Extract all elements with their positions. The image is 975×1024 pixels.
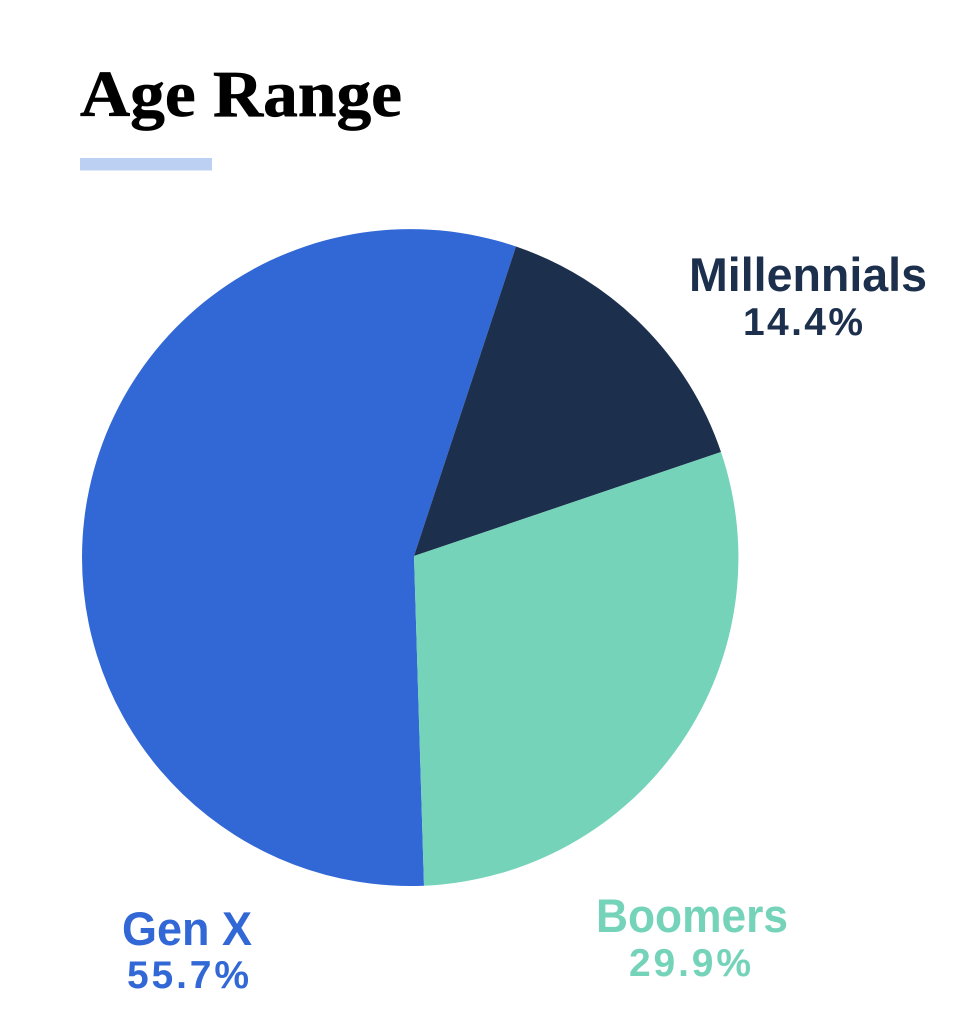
slice: Gen X — [82, 229, 516, 886]
label: Boomers: 29.9% — [629, 942, 751, 985]
title: Age Range — [80, 58, 402, 131]
label: Millennials: Millennials — [689, 248, 927, 301]
slice: Millennials — [414, 246, 721, 556]
label: Gen X: 55.7% — [127, 954, 249, 997]
label: Boomers: Boomers — [596, 889, 788, 942]
pie chart — [82, 229, 738, 886]
label: Millennials — [689, 248, 927, 344]
label: Millennials: 14.4% — [743, 301, 863, 344]
title underline — [80, 158, 212, 170]
label: Boomers — [596, 889, 788, 985]
label: Gen X — [122, 902, 252, 997]
label: Gen X: Gen X — [122, 902, 252, 955]
slice: Boomers — [414, 452, 738, 886]
